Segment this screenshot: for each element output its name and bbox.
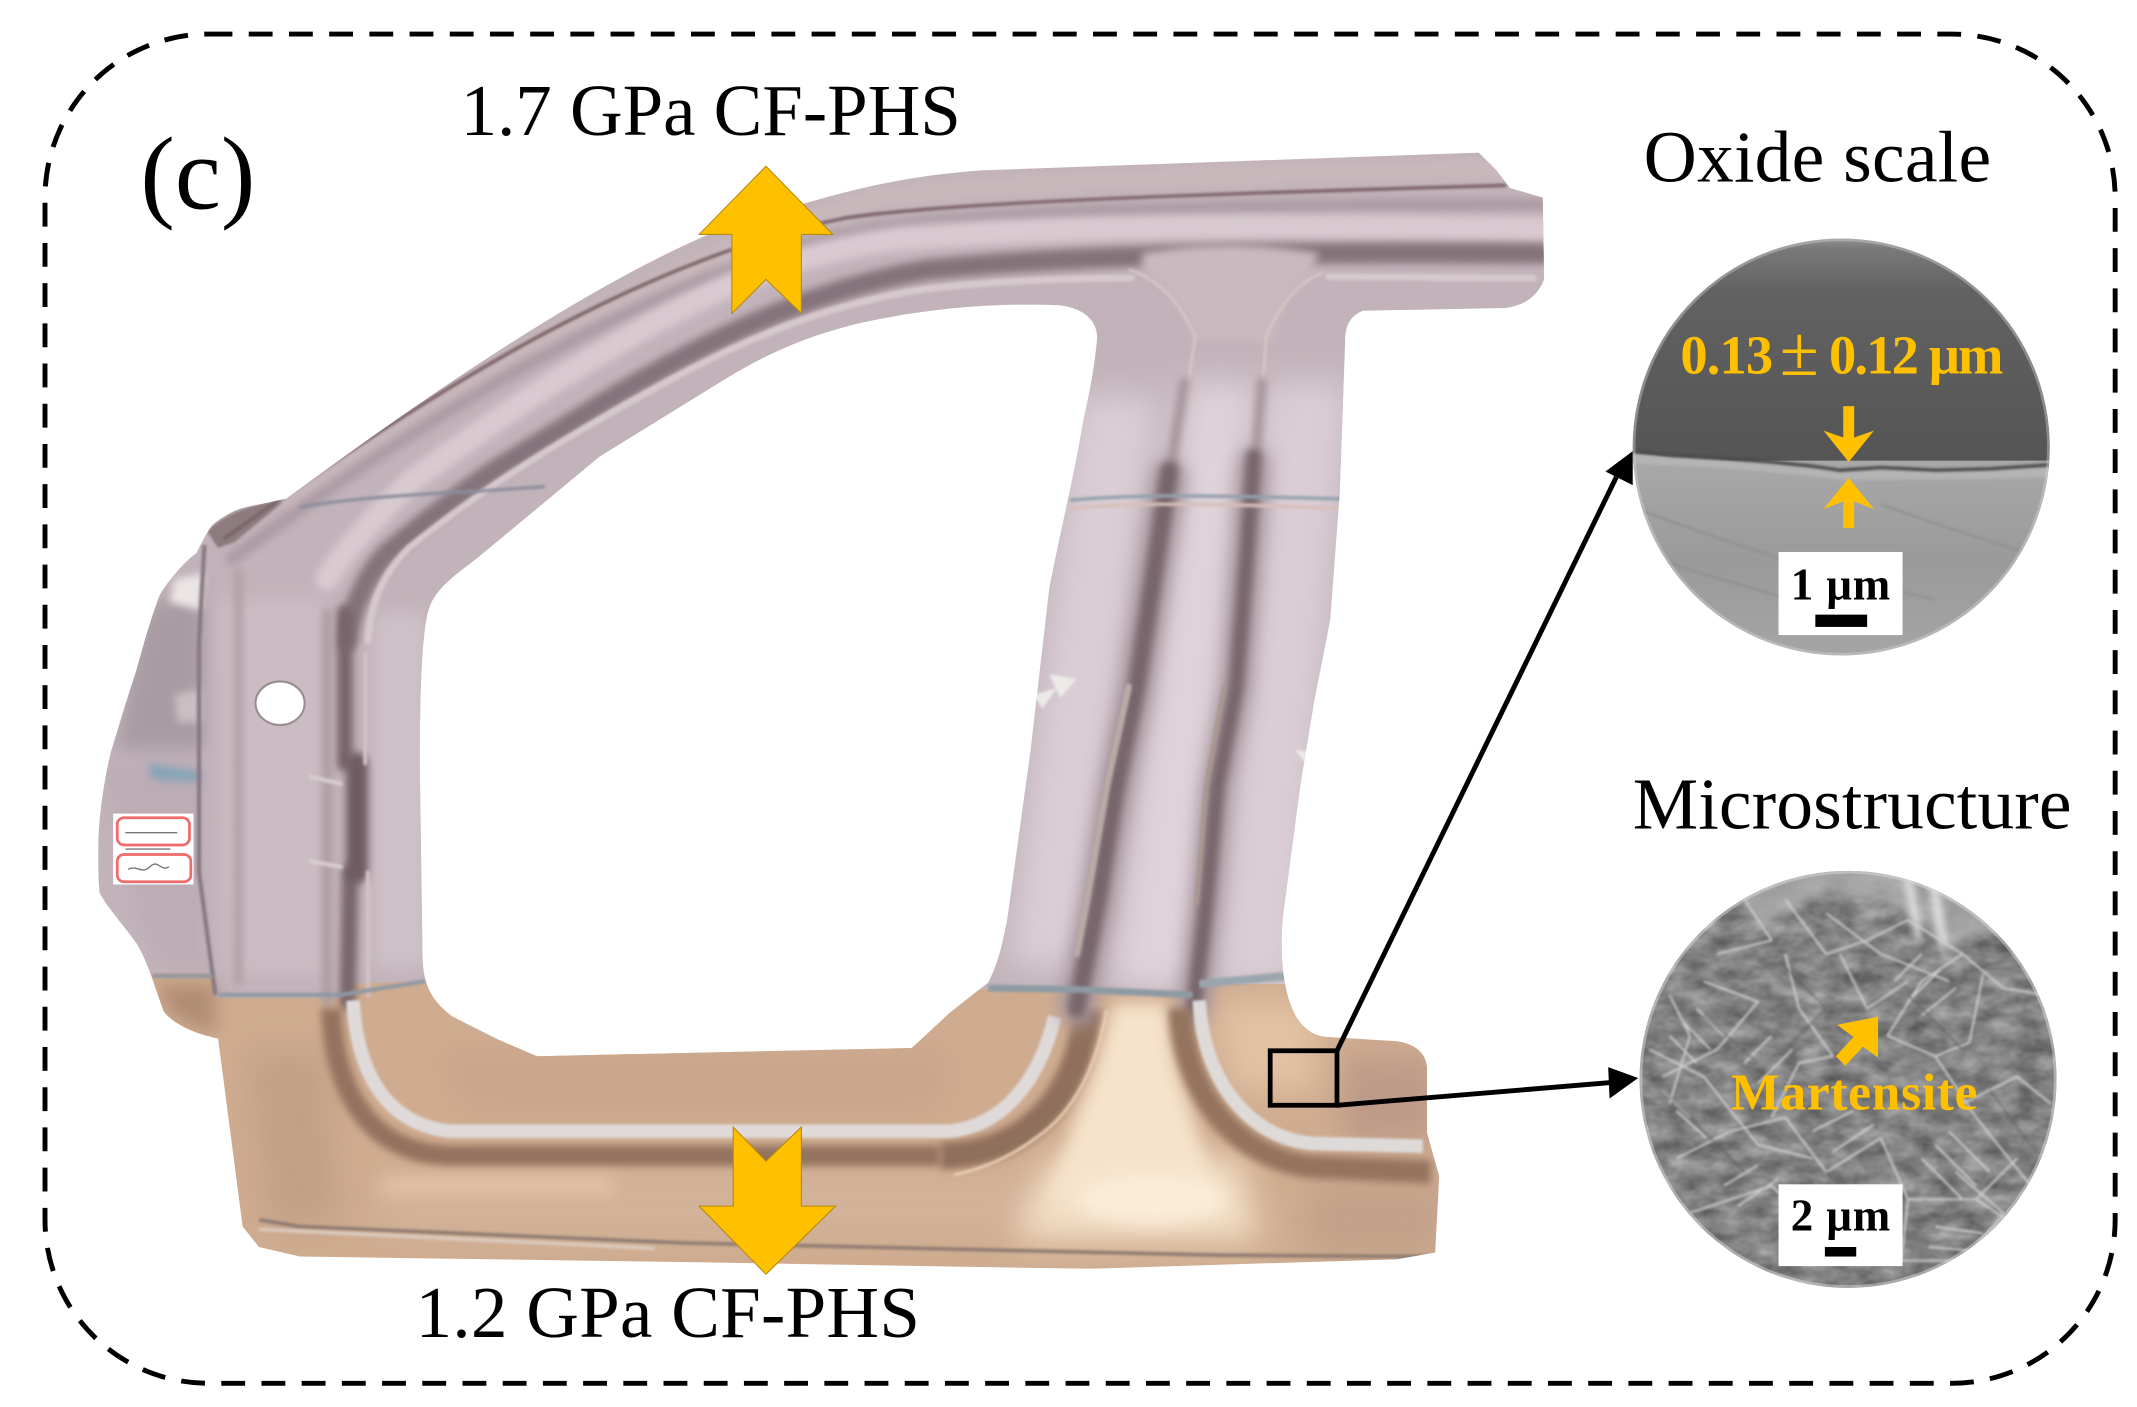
yellow up thickness arrow <box>1824 478 1874 528</box>
left pillar rib <box>239 572 368 1002</box>
scale bar 2 micron <box>1779 1184 1903 1266</box>
lower steel base <box>82 973 1458 1281</box>
heading: Microstructure: Microstructure <box>1633 763 2072 845</box>
yellow up arrow <box>699 166 833 313</box>
yellow down arrow <box>699 1127 835 1274</box>
inset box on the part <box>1270 1051 1337 1105</box>
heading: Oxide scale: Oxide scale <box>1644 115 1991 197</box>
martensite label: Martensite <box>1731 1064 1978 1121</box>
bright top grain stripes <box>1731 865 1997 947</box>
martensite micrograph <box>1629 861 2072 1297</box>
panel label (c): (c) <box>140 118 255 232</box>
hole in pillar <box>256 681 305 725</box>
paper tag <box>113 814 194 884</box>
lighter panels of the upper steel <box>1009 382 1349 988</box>
arrow: box to oxide scale <box>1337 451 1633 1051</box>
stem hub <box>1138 243 1322 275</box>
heading: 1.2 GPa CF-PHS: 1.2 GPa CF-PHS <box>416 1272 920 1353</box>
arrow: box to microstructure <box>1337 1067 1638 1105</box>
lower U rail <box>259 1000 1431 1257</box>
oxide scale micrograph <box>1622 232 2065 665</box>
heading: 1.7 GPa CF-PHS: 1.7 GPa CF-PHS <box>461 70 961 151</box>
substrate <box>1633 460 2050 656</box>
lath boundaries <box>1649 899 2051 1261</box>
weld line between the two steel grades <box>153 487 1342 995</box>
scale bar 1 micron: 1 μm <box>1791 560 1890 610</box>
dark oxide layer <box>1622 232 2065 470</box>
roof arch flange and bands <box>225 169 1544 641</box>
B-pillar ribs <box>1033 245 1323 1009</box>
scale bar 1 micron <box>1779 552 1903 635</box>
upper steel base <box>82 136 1567 1022</box>
right lower rail <box>1180 1000 1431 1172</box>
yellow down thickness arrow <box>1824 406 1874 462</box>
door ring steel part <box>82 136 1567 1281</box>
left flange details <box>147 572 204 782</box>
yellow diagonal arrow <box>1836 1017 1878 1066</box>
measurement value: 0.12 μm <box>1829 324 2003 385</box>
measurement value: 0.13 <box>1680 324 1773 385</box>
bright central reflection <box>157 984 1227 1224</box>
measurement value: ± <box>1780 313 1819 391</box>
scale bar 2 micron: 2 μm <box>1791 1191 1890 1241</box>
lower section tonal patches <box>245 1002 1445 1261</box>
